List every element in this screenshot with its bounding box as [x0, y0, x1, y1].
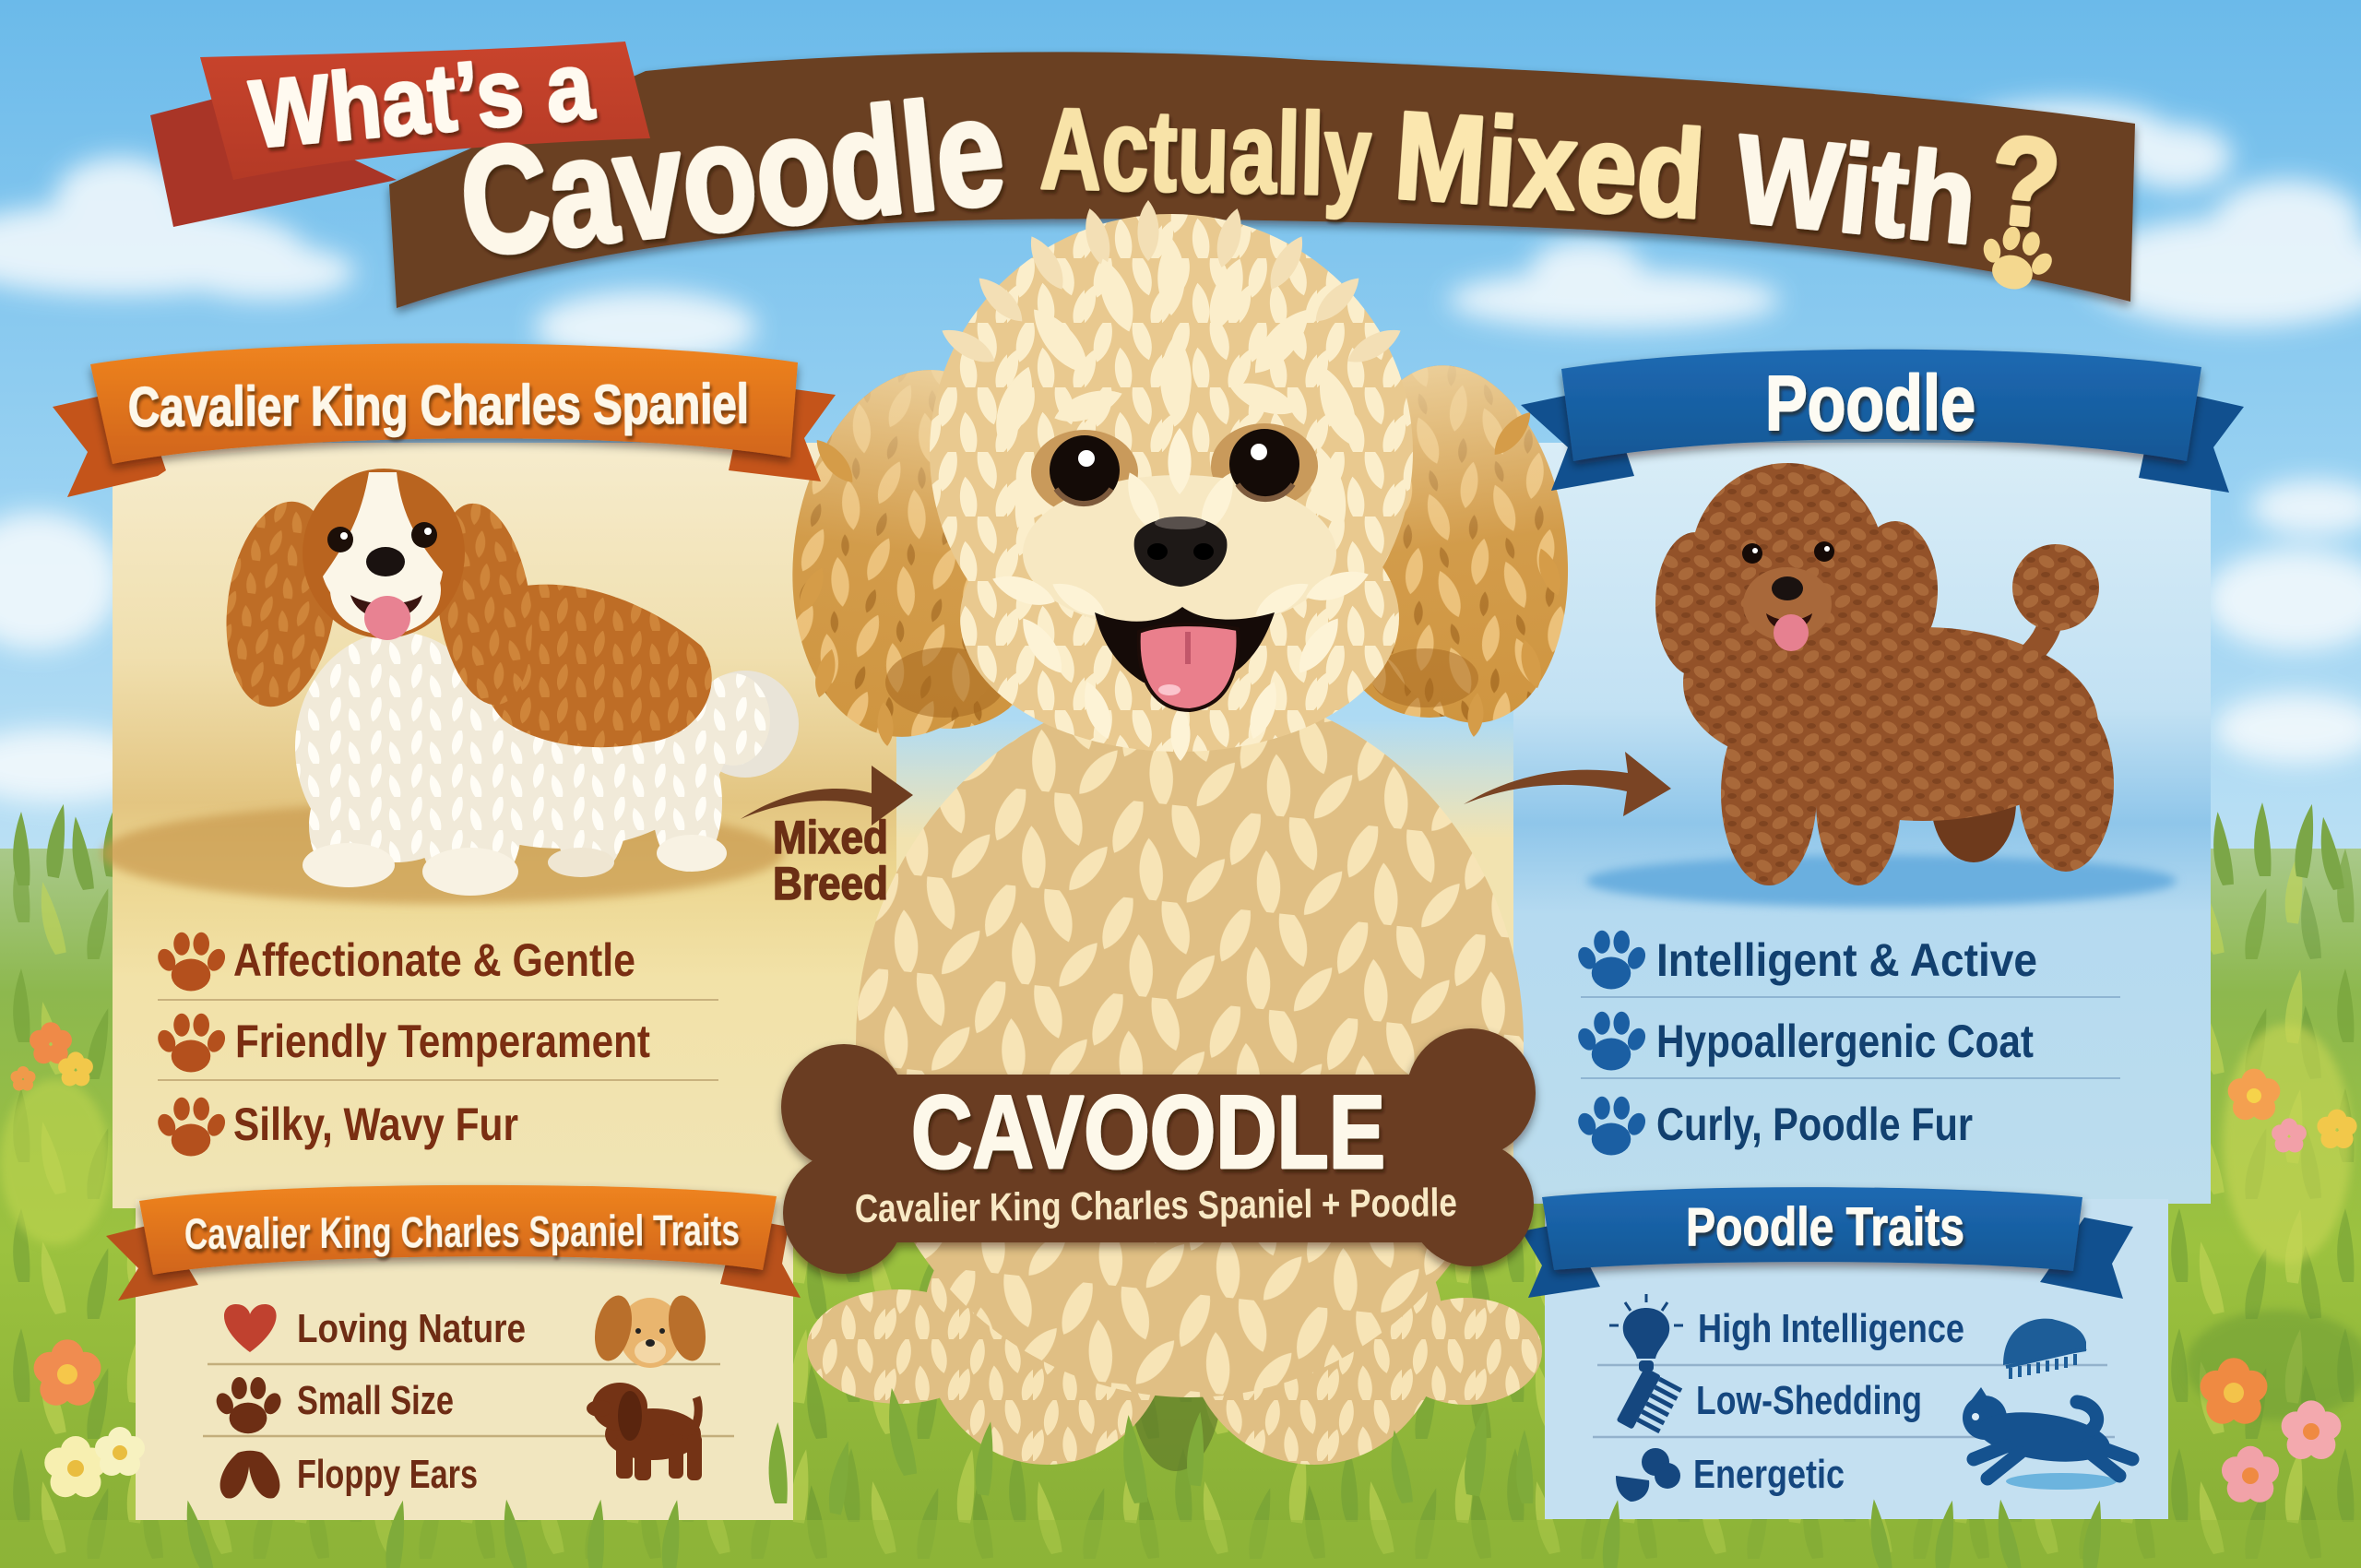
panel: cavalier [113, 443, 896, 1208]
title word: actually: Actually [1038, 85, 1372, 220]
list: cavalier features [155, 932, 718, 1157]
cavalier dog illustration [101, 469, 799, 904]
list: poodle features [1575, 931, 2120, 1155]
panel: poodle traits [1545, 1199, 2168, 1519]
trait text: high intelligence: High Intelligence [1698, 1306, 1964, 1351]
trait text: small size: Small Size [297, 1378, 454, 1423]
icon: heart [224, 1304, 277, 1352]
ribbon: cavalier traits heading [106, 1185, 801, 1301]
flowers right [2201, 1069, 2357, 1503]
dog head [930, 200, 1413, 690]
title ribbon: what's a: What’s a [246, 32, 599, 169]
flowers left [11, 1022, 145, 1497]
cavoodle main dog [769, 200, 1590, 1471]
feature row: intelligent and active [1575, 931, 2037, 989]
icon: comb [1616, 1367, 1683, 1441]
dog right ear [1328, 351, 1590, 738]
trait text: low-shedding: Low-Shedding [1696, 1378, 1922, 1423]
feature row: friendly temperament [155, 1014, 650, 1072]
feature row: silky wavy fur [155, 1098, 518, 1157]
title question mark: ? [1985, 109, 2065, 254]
bone label [781, 1028, 1536, 1274]
ribbon: poodle traits heading [1522, 1187, 2133, 1299]
panel: poodle [1513, 443, 2211, 1204]
leg shadow [1130, 1296, 1222, 1471]
feature row: curly poodle fur: Curly, Poodle Fur [1656, 1099, 1973, 1150]
list: poodle traits [1593, 1294, 2132, 1502]
icon: paw [213, 1377, 284, 1433]
grass foreground [180, 1386, 2108, 1568]
bone subtitle: Cavalier King Charles Spaniel + Poodle [855, 1181, 1457, 1231]
panel: cavalier traits [136, 1199, 793, 1520]
ribbon text: poodle: Poodle [1765, 360, 1975, 446]
feature row: hypoallergenic coat [1575, 1012, 2034, 1070]
title word: mixed: Mixed [1391, 85, 1708, 244]
icon: title paw [1972, 220, 2061, 299]
list: cavalier traits [203, 1292, 734, 1499]
icon: standing dog [587, 1383, 702, 1480]
ribbon text: cavalier traits: Cavalier King Charles Spaniel Traits [184, 1206, 740, 1258]
feature row: silky wavy fur: Silky, Wavy Fur [233, 1099, 518, 1150]
trait text: floppy ears: Floppy Ears [297, 1452, 478, 1497]
dog legs [922, 1192, 1443, 1465]
ribbon text: cavalier king charles spaniel: Cavalier King Charles Spaniel [128, 373, 749, 438]
feature row: affectionate and gentle [155, 932, 635, 991]
label: mixed breed: Mixed [773, 812, 888, 863]
feature row: hypoallergenic coat: Hypoallergenic Coat [1656, 1016, 2034, 1067]
feature row: friendly temperament: Friendly Temperament [235, 1016, 650, 1067]
clouds [0, 101, 2361, 802]
panel: center backdrop [885, 719, 1522, 1199]
arrow: left to cavoodle [741, 766, 913, 826]
dog nose [1134, 517, 1227, 587]
dog mouth and tongue [1095, 607, 1275, 710]
dog eye sockets [1031, 423, 1318, 515]
bone title: cavoodle: CAVOODLE [911, 1075, 1385, 1190]
ribbon: poodle heading [1521, 350, 2244, 493]
icon: brush [2003, 1319, 2086, 1379]
title banner [150, 32, 2135, 308]
title ribbon: what's a [150, 32, 650, 227]
label: mixed breed [773, 812, 888, 909]
dog body [856, 687, 1524, 1397]
feature row: curly poodle fur [1575, 1097, 1973, 1155]
icon: energetic [1616, 1448, 1680, 1502]
label: mixed breed: Breed [773, 858, 888, 909]
feature row: affectionate and gentle: Affectionate & Gentle [233, 934, 635, 986]
grass meadow [0, 802, 2361, 1568]
ribbon: cavalier heading [53, 343, 836, 497]
icon: running dog [1963, 1387, 2132, 1490]
ribbon text: poodle traits: Poodle Traits [1686, 1197, 1964, 1257]
dog eyes [1050, 429, 1299, 505]
title word: cavoodle: Cavoodle [453, 65, 1012, 288]
feature row: intelligent and active: Intelligent & Active [1656, 934, 2037, 986]
arrow: poodle to cavoodle [1464, 752, 1671, 816]
poodle dog illustration [1586, 463, 2177, 907]
trait text: energetic: Energetic [1693, 1452, 1845, 1497]
trait text: loving nature: Loving Nature [297, 1306, 526, 1351]
dog muzzle [960, 428, 1399, 761]
dog side paws [807, 1289, 1542, 1405]
title word: with: With [1729, 109, 1982, 270]
icon: floppy ears [220, 1451, 279, 1499]
icon: light bulb [1609, 1294, 1683, 1372]
sky background [0, 0, 2361, 1015]
dog left ear [769, 354, 1062, 753]
icon: dog head [589, 1292, 711, 1368]
